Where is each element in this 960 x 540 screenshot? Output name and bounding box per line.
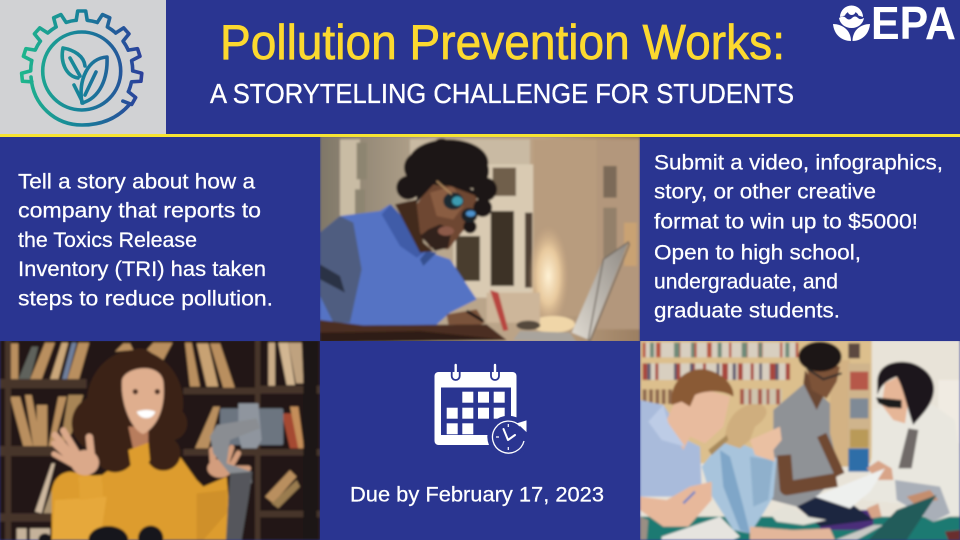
- shirt: [320, 204, 477, 328]
- student left: man in blue shirt: [640, 400, 702, 497]
- papers and laptop: [662, 517, 740, 540]
- photo: student filming video: [0, 340, 320, 540]
- panel: submission details: Submit a video, infographics,: [654, 150, 943, 174]
- icon: EPA flower: [833, 6, 870, 41]
- panel: story prompt: steps to reduce pollution.: [18, 286, 273, 310]
- title: Pollution Prevention Works:: [220, 16, 785, 70]
- face: [122, 368, 164, 434]
- hair: [396, 138, 497, 233]
- floor and mats: [640, 517, 960, 540]
- waving hand: [54, 431, 99, 475]
- panel: submission details: [654, 150, 943, 322]
- glasses: [443, 192, 463, 210]
- panel: story prompt: the Toxics Release: [18, 228, 197, 252]
- panel: submission details: story, or other creative: [654, 180, 876, 204]
- student: girl in plaid shirt: [702, 443, 777, 533]
- panel: story prompt: [18, 170, 273, 310]
- panel: deadline: [350, 365, 604, 506]
- panel: submission details: format to win up to $5000!: [654, 210, 918, 234]
- yellow divider: [0, 134, 960, 137]
- EPA logo: [833, 0, 956, 49]
- panel: story prompt: company that reports to: [18, 198, 261, 222]
- icon: gear with leaves: [20, 9, 144, 127]
- hair: [72, 348, 187, 472]
- photo: students collaborating in library: [640, 340, 960, 540]
- paper: [815, 468, 885, 508]
- bookshelves: [10, 343, 304, 540]
- panel: story prompt: Tell a story about how a: [18, 170, 255, 194]
- panel: story prompt: Inventory (TRI) has taken: [18, 257, 266, 281]
- icon: calendar with clock: [434, 365, 529, 458]
- panel: submission details: Open to high school,: [654, 240, 861, 264]
- logo panel: [0, 0, 166, 134]
- books: [643, 350, 798, 397]
- neck and face: [395, 199, 433, 253]
- forearm and hand: [447, 309, 485, 326]
- panel: submission details: graduate students.: [654, 298, 840, 322]
- hoodie: [50, 456, 230, 540]
- headphones: [88, 526, 128, 540]
- photo: man at laptop: [320, 136, 640, 343]
- student right: woman in white jacket: [870, 456, 950, 524]
- other hand: [207, 447, 248, 478]
- subtitle: A STORYTELLING CHALLENGE FOR STUDENTS: [210, 78, 794, 109]
- gimbal and phone: [220, 408, 283, 445]
- panel: submission details: undergraduate, and: [654, 270, 838, 294]
- student back: man in grey polo: [772, 382, 840, 507]
- neck and collar: [128, 427, 148, 450]
- due date: Due by February 17, 2023: [350, 484, 604, 506]
- header band: [0, 0, 960, 137]
- laptop: [514, 330, 576, 341]
